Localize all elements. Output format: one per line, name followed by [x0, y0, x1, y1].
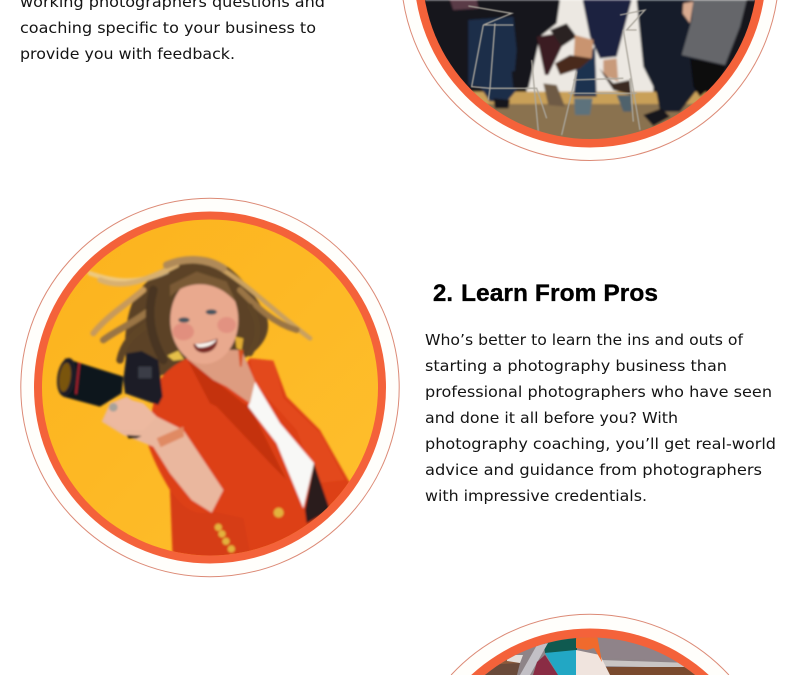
white top [248, 382, 314, 508]
fingers [132, 400, 157, 416]
eyes [178, 317, 190, 323]
neck [187, 350, 255, 403]
blazer [147, 358, 357, 577]
face [170, 276, 238, 364]
text block: learn from pros paragraph: professional photographers who have seen [425, 383, 772, 401]
photo circle: group of people on stools [400, 0, 800, 160]
text block: learn from pros paragraph: and done it all before you? With [425, 409, 678, 427]
text block: learn from pros paragraph: photography coaching, you’ll get real-world [425, 435, 776, 453]
text block: intro feedback paragraph [20, 0, 325, 63]
text block: learn from pros paragraph [425, 331, 776, 505]
earrings [167, 351, 184, 361]
heading: 2. Learn From Pros: Learn From Pros [461, 280, 658, 307]
stools [468, 6, 645, 135]
arm [102, 397, 223, 513]
text block: learn from pros paragraph: starting a photography business than [425, 357, 727, 375]
gold buttons [215, 508, 284, 553]
text block: intro feedback paragraph: coaching specific to your business to [20, 19, 316, 37]
text block: learn from pros paragraph: advice and guidance from photographers [425, 461, 762, 479]
text block: learn from pros paragraph: Who’s better to learn the ins and outs of [425, 331, 744, 349]
heading: 2. Learn From Pros: 2. [433, 280, 453, 307]
text block: intro feedback paragraph: provide you with feedback. [20, 45, 235, 63]
photo circle: photographer with camera on yellow background [21, 198, 399, 577]
camera [63, 358, 123, 407]
hair [90, 257, 310, 380]
text block: learn from pros paragraph: with impressive credentials. [425, 487, 647, 505]
photo circle: next section image, cropped at bottom [451, 614, 729, 675]
mouth [193, 338, 217, 353]
